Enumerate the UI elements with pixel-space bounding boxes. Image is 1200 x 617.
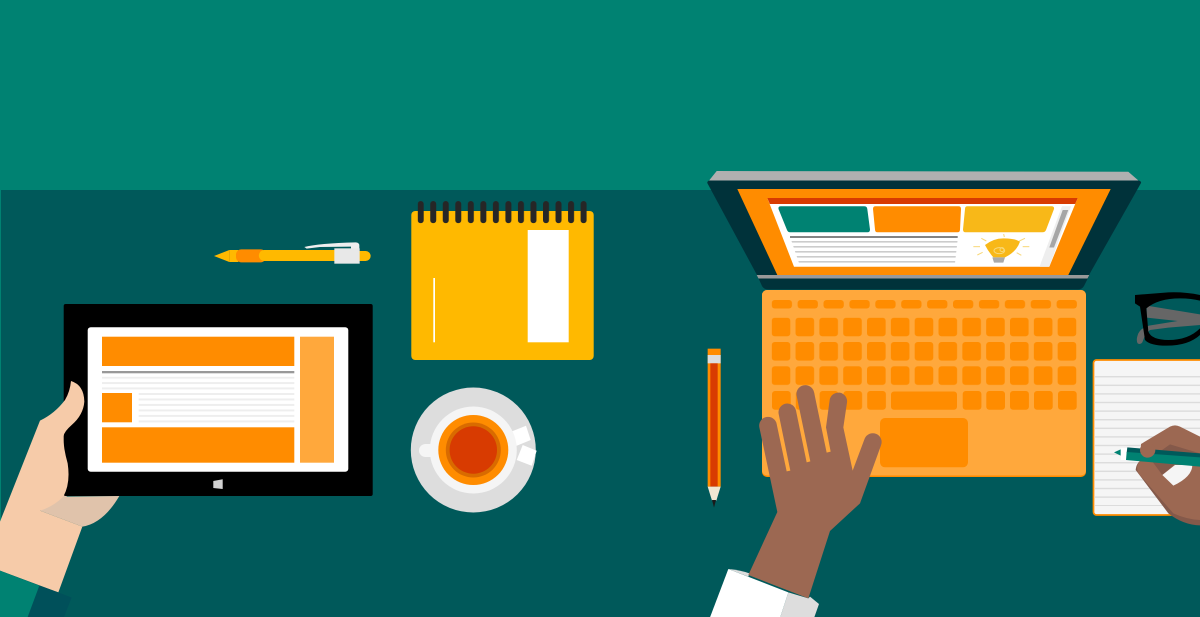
notebook spiral rings: [418, 201, 590, 223]
laptop orange bezel: [737, 189, 1111, 275]
laptop lid frame: [707, 180, 1141, 275]
gap between finger and thumb: [1162, 465, 1192, 486]
laptop bottom row keys, right: [963, 391, 1077, 410]
screen text lines: [792, 241, 958, 263]
left sleeve cuff: [28, 586, 72, 617]
saucer: [411, 388, 536, 512]
pencil: [708, 349, 721, 508]
tablet sidebar: [300, 337, 334, 463]
notebook margin line: [433, 278, 435, 342]
laptop hinge strip: [757, 275, 1089, 278]
laptop title bar: [767, 198, 1078, 204]
cup rim: [438, 415, 508, 485]
hand holding tablet: thumb and wrist: [0, 381, 84, 592]
upper fingertip: [1140, 442, 1155, 458]
hand holding tablet: back of hand: [40, 432, 119, 527]
notebook cover: [411, 211, 594, 360]
laptop keyboard deck: [762, 290, 1086, 477]
screen scrollbar thumb: [1049, 210, 1068, 248]
tablet heading rule: [102, 371, 294, 373]
notebook label: [528, 230, 569, 342]
screen heading rule: [790, 236, 958, 238]
palm and fingers: [1137, 425, 1200, 520]
tablet text lines, lower: [139, 393, 294, 423]
icon: light bulb: [973, 234, 1029, 263]
pencil tip: [1114, 449, 1121, 456]
background: wall: [0, 0, 1200, 190]
laptop letter keys: [772, 318, 1077, 386]
cup: [430, 406, 517, 494]
writing hand: [1114, 425, 1200, 525]
typing hand: [748, 385, 882, 598]
typing hand sleeve: [709, 569, 819, 617]
notebook: yellow spiral: [411, 201, 594, 360]
coffee cup on saucer: [411, 388, 537, 512]
tablet footer banner: [102, 427, 294, 463]
tablet screen: [88, 327, 348, 472]
glasses: [1135, 292, 1200, 346]
background: desk: [0, 190, 1200, 617]
pencil barrel: [1126, 452, 1200, 467]
laptop hinge: [757, 275, 1090, 290]
pencil barrel dark stripe: [1127, 447, 1200, 458]
glasses temple arms: [1137, 306, 1200, 344]
notepad ruled lines: [1095, 376, 1200, 506]
screen scrollbar: [1040, 206, 1071, 267]
pen: yellow: [214, 242, 371, 264]
laptop space bar: [891, 392, 957, 410]
laptop keyboard surface: [762, 290, 1086, 476]
tablet body: [64, 304, 373, 496]
screen tile: orange: [873, 206, 961, 232]
left sleeve: [0, 571, 39, 617]
coffee surface: [450, 426, 497, 474]
sugar cubes: [511, 426, 537, 466]
laptop lid top edge: [707, 171, 1141, 183]
screen tile: teal: [778, 206, 870, 232]
screen tile: yellow: [963, 206, 1054, 232]
shaded fold beside gap: [1152, 461, 1175, 475]
desk left edge strip: [0, 190, 1, 617]
tablet: [64, 304, 373, 496]
lower finger shadow: [1136, 459, 1200, 525]
laptop function keys: [772, 300, 1078, 309]
pencil clearance on paper: [1121, 448, 1127, 460]
laptop bottom row keys, left: [772, 391, 887, 410]
shaded knuckle above pencil: [1155, 444, 1200, 455]
tablet windows button: [213, 479, 223, 489]
writing notepad: [1094, 360, 1200, 515]
laptop screen: [767, 198, 1078, 267]
coffee edge: [446, 422, 501, 478]
laptop touchpad: [880, 418, 968, 467]
tablet header banner: [102, 337, 294, 366]
laptop lid: [707, 171, 1141, 290]
notepad page: [1094, 360, 1200, 515]
tablet text lines, upper: [102, 377, 294, 390]
glasses frame: [1135, 292, 1200, 346]
cup handle: [419, 444, 439, 457]
tablet thumbnail: [102, 393, 132, 422]
